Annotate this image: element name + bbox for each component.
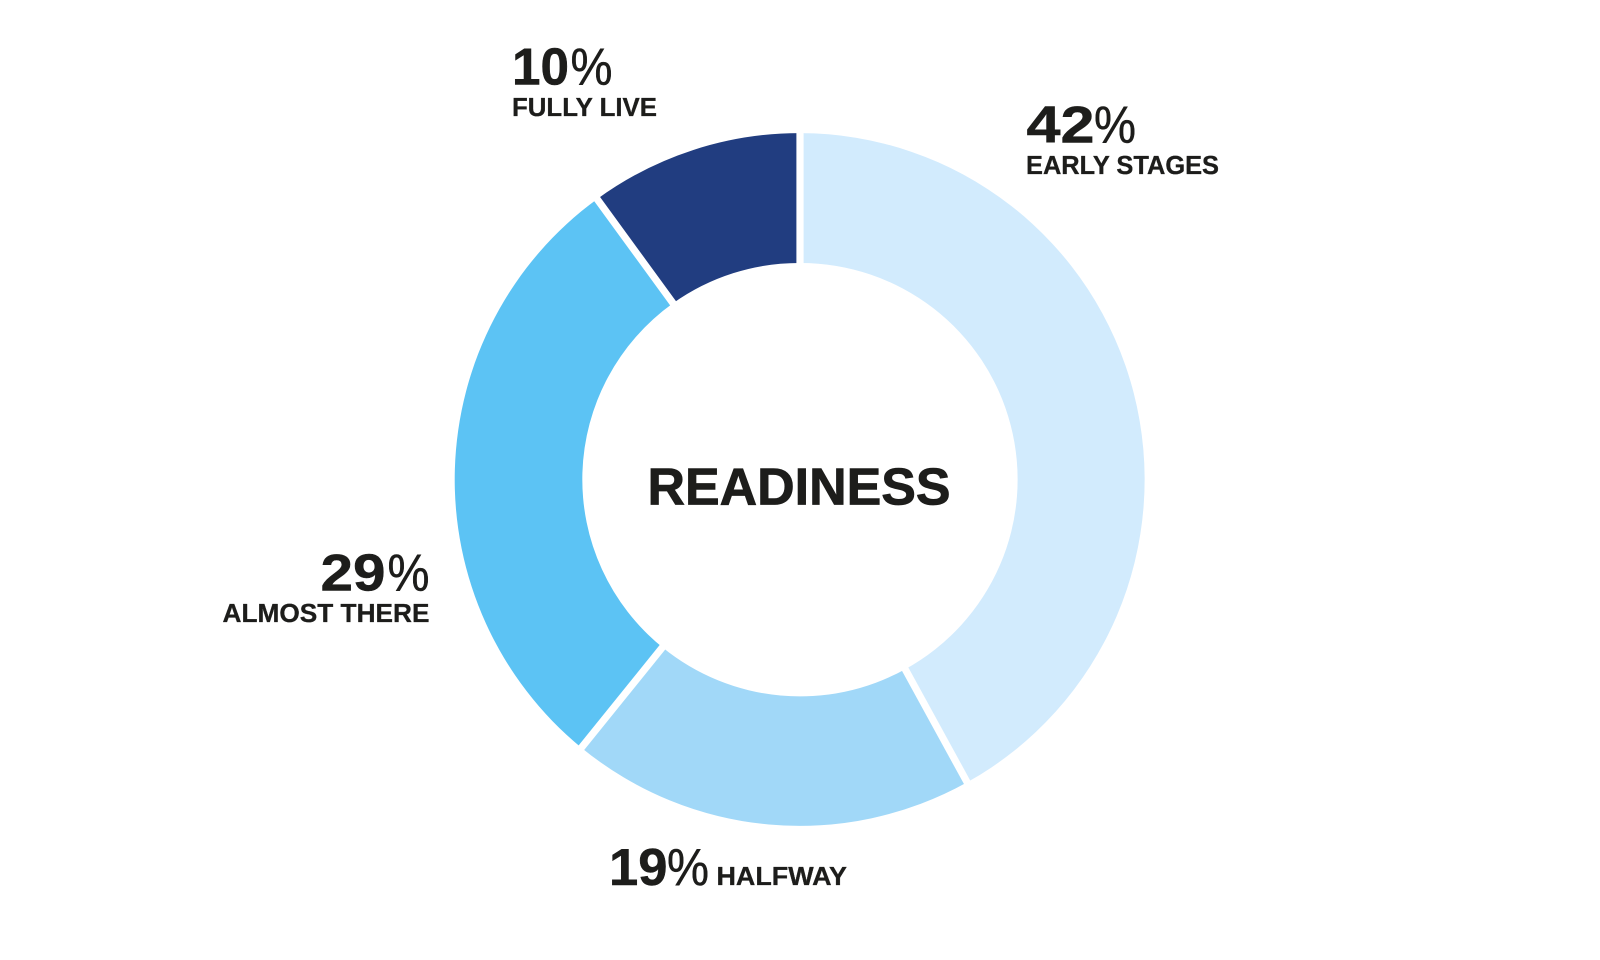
segment: fully live 10% <box>597 133 800 303</box>
donut chart <box>455 125 1145 826</box>
label: fully live: 10 <box>512 38 569 96</box>
label: fully live: % <box>570 38 612 96</box>
label: early stages: EARLY STAGES <box>1026 152 1219 180</box>
label: halfway: 19 <box>609 839 668 897</box>
segment: almost there 29% <box>455 199 673 748</box>
label: halfway <box>609 839 847 897</box>
label: fully live: FULLY LIVE <box>512 94 657 122</box>
label: almost there <box>222 545 430 628</box>
label: early stages <box>1026 96 1219 180</box>
label: halfway: HALFWAY <box>716 863 847 891</box>
label: almost there: 29 <box>320 545 386 603</box>
label: early stages: 42 <box>1026 96 1094 154</box>
segment: early stages 42% <box>800 133 1145 782</box>
center title: READINESS <box>648 458 950 516</box>
label: halfway: % <box>667 839 709 897</box>
label: early stages: % <box>1094 96 1136 154</box>
label: almost there: ALMOST THERE <box>222 600 430 628</box>
segment: halfway 19% <box>581 647 967 826</box>
label: almost there: % <box>388 545 430 603</box>
label: fully live <box>512 38 657 122</box>
